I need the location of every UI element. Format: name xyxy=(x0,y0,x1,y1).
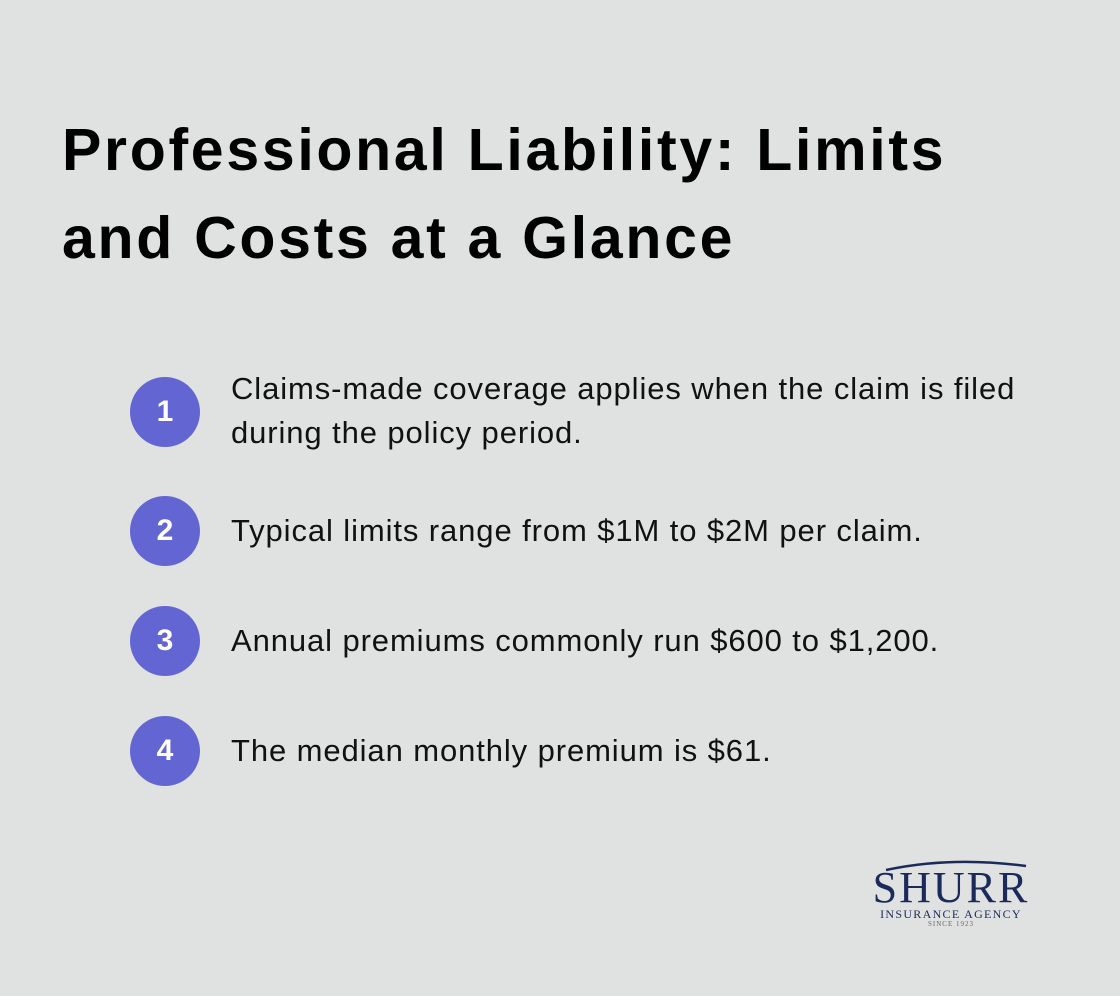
logo: SINCE 1923 xyxy=(928,920,974,928)
logo: SHURR xyxy=(873,863,1029,912)
item 3: Annual premiums commonly run $600 to $1,200. xyxy=(231,623,939,658)
item 2 xyxy=(130,496,923,566)
item 1: 1 xyxy=(157,395,173,428)
item 1: Claims-made coverage applies when the claim is filed xyxy=(231,371,1015,406)
item 3 xyxy=(130,606,939,676)
item 1: during the policy period. xyxy=(231,415,583,450)
logo: INSURANCE AGENCY xyxy=(880,907,1022,921)
title: and Costs at a Glance xyxy=(62,205,735,271)
item 2: Typical limits range from $1M to $2M per claim. xyxy=(231,513,923,548)
item 3: 3 xyxy=(157,624,173,657)
title: Professional Liability: Limits xyxy=(62,117,946,183)
item 1 xyxy=(130,371,1015,450)
item 4: 4 xyxy=(157,734,173,767)
item 2: 2 xyxy=(157,514,173,547)
title xyxy=(62,117,946,271)
item 4: The median monthly premium is $61. xyxy=(231,733,772,768)
item 4 xyxy=(130,716,772,786)
